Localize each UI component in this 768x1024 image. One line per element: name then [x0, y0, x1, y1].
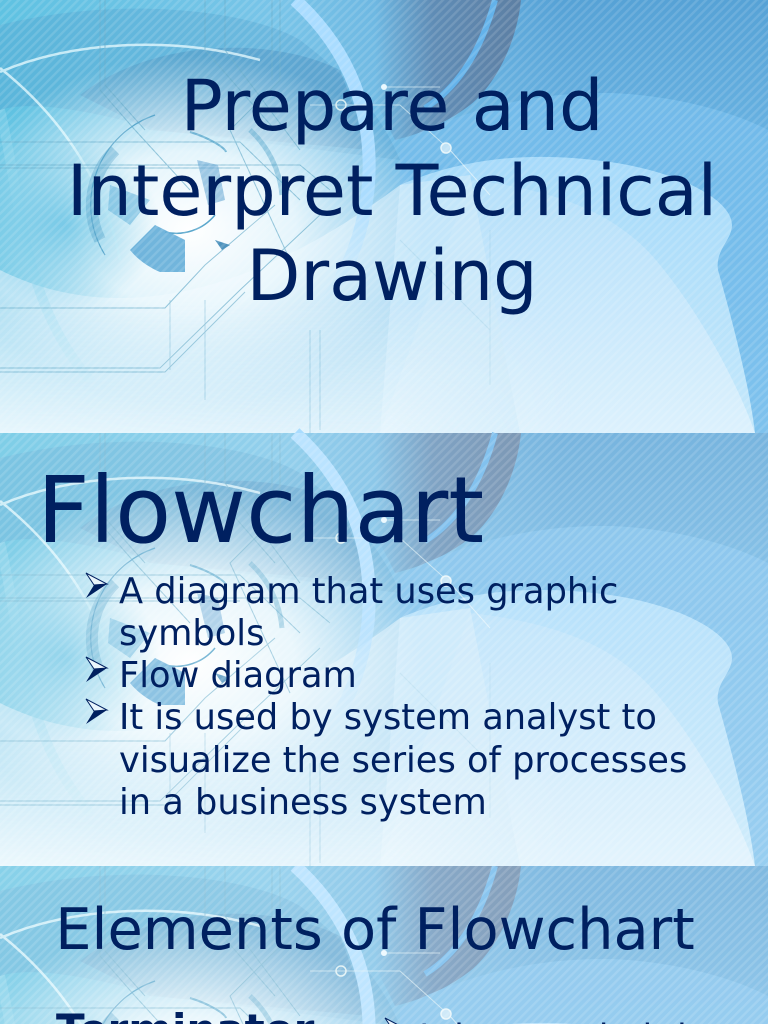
- icon: arrow bullet: [86, 573, 107, 598]
- icon: arrow bullet: [86, 657, 107, 682]
- title: Prepare and Interpret Technical Drawing: [67, 65, 717, 317]
- icon: arrow bullet: [86, 699, 107, 724]
- bullet list: flowchart definition: A diagram that uses graphic: [119, 571, 618, 612]
- heading: Flowchart: Flowchart: [37, 457, 484, 564]
- title: Prepare and Interpret Technical Drawing: Interpret Technical: [67, 150, 717, 232]
- title: Prepare and Interpret Technical Drawing: Drawing: [246, 235, 538, 317]
- heading: Elements of Flowchart: Elements of Flowchart: [55, 896, 695, 963]
- bullet list: flowchart definition: It is used by system analyst to: [119, 697, 657, 738]
- bullet list: flowchart definition: visualize the series of processes: [119, 740, 687, 781]
- slide 3 background: [0, 866, 768, 1024]
- slide 2 background: [0, 433, 768, 866]
- bullet list: flowchart definition: in a business system: [119, 782, 487, 823]
- title: Prepare and Interpret Technical Drawing: Prepare and: [181, 65, 603, 147]
- slide 1 background: [0, 0, 768, 433]
- icon: arrow bullet: [385, 1018, 406, 1024]
- bullet list: flowchart definition: [86, 571, 687, 823]
- bullet list: flowchart definition: Flow diagram: [119, 655, 357, 696]
- bullet list: flowchart definition: symbols: [119, 613, 264, 654]
